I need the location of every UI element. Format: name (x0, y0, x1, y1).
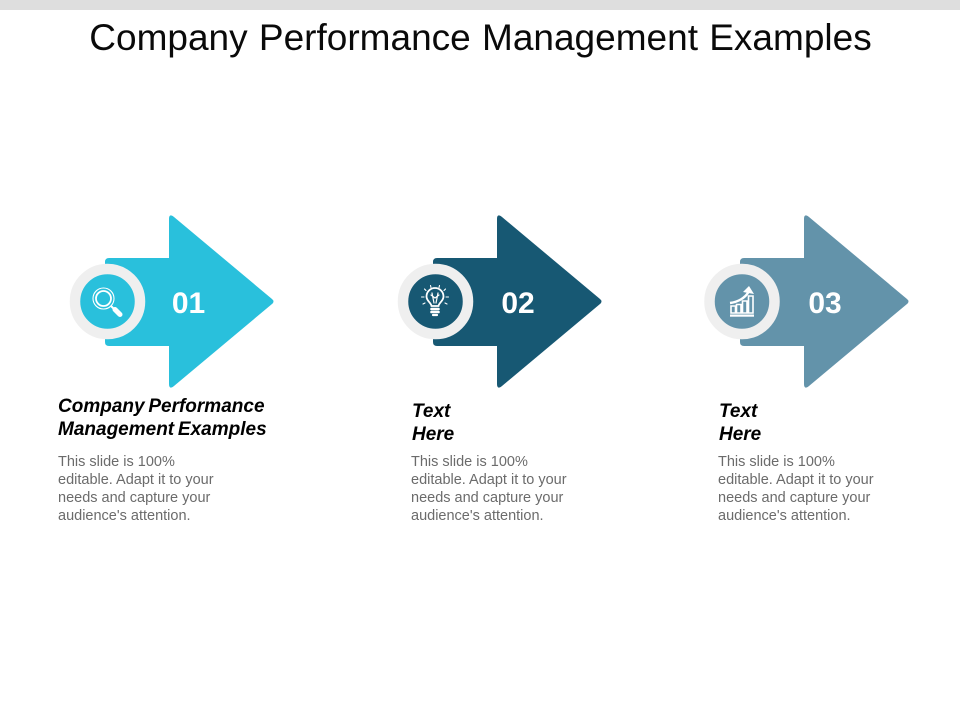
heading: column 3: Text (719, 401, 757, 422)
text block: column 3: This slide is 100% (718, 454, 835, 470)
text block: column 1: audience's attention. (58, 508, 191, 524)
text block: column 3: audience's attention. (718, 508, 851, 524)
number 02: 02 (501, 287, 535, 320)
heading: column 2: Here (412, 424, 454, 445)
text block: column 3 (718, 454, 874, 524)
heading: column 2: Text (412, 401, 450, 422)
icon: magnifying glass (93, 288, 120, 314)
icon: light bulb (422, 286, 448, 315)
title: Company Performance Management Examples (89, 17, 872, 58)
text block: column 1 (58, 454, 214, 524)
text block: column 1: needs and capture your (58, 490, 210, 506)
heading: column 1: Management Examples (58, 419, 267, 440)
heading: column 3 (719, 401, 761, 445)
heading: column 3: Here (719, 424, 761, 445)
text block: column 3: needs and capture your (718, 490, 870, 506)
text block: column 1: editable. Adapt it to your (58, 472, 214, 488)
text block: column 3: editable. Adapt it to your (718, 472, 874, 488)
heading: column 1 (58, 396, 267, 440)
heading: column 2 (412, 401, 454, 445)
text block: column 2 (411, 454, 567, 524)
heading: column 1: Company Performance (58, 396, 265, 417)
arrow 01 (75, 215, 274, 388)
arrow 02 (403, 215, 602, 388)
number 01: 01 (172, 287, 205, 320)
text block: column 2: editable. Adapt it to your (411, 472, 567, 488)
icon: rising bar chart (730, 286, 754, 317)
text block: column 2: This slide is 100% (411, 454, 528, 470)
text block: column 2: audience's attention. (411, 508, 544, 524)
number 03: 03 (808, 287, 842, 320)
arrow 03 (710, 215, 908, 388)
text block: column 1: This slide is 100% (58, 454, 175, 470)
text block: column 2: needs and capture your (411, 490, 563, 506)
